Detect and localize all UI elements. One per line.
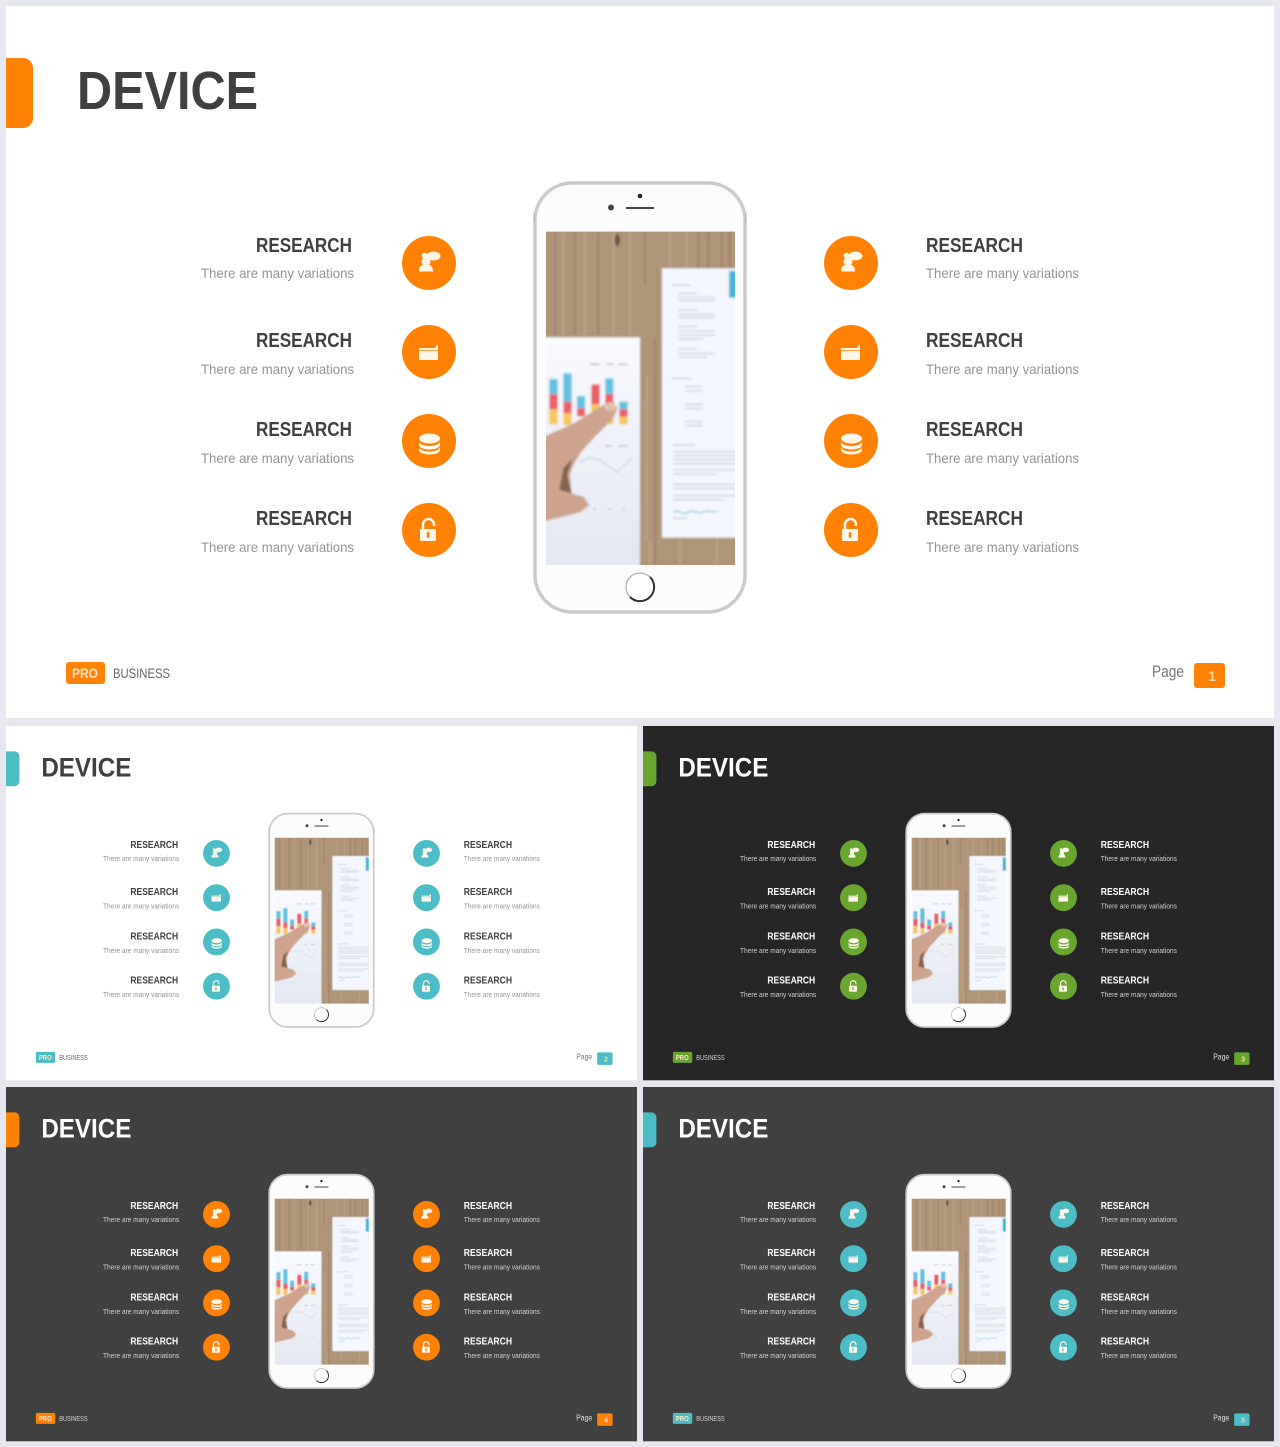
icon: database left	[203, 929, 230, 955]
footer brand: PRO	[39, 1416, 52, 1423]
left row 3: There are many variations	[103, 1309, 180, 1316]
left row 2: RESEARCH	[767, 887, 815, 898]
left row 1: There are many variations	[740, 856, 817, 863]
icon: folder left	[203, 1245, 230, 1272]
icon: folder right	[1050, 884, 1077, 911]
left row 4: There are many variations	[103, 992, 180, 999]
right row 3: There are many variations	[926, 450, 1079, 466]
left row 1: There are many variations	[103, 1217, 180, 1224]
left row 1: RESEARCH	[767, 1201, 815, 1212]
right row 2	[464, 887, 540, 911]
icon: folder left	[840, 1245, 867, 1272]
icon: open lock right	[1050, 1334, 1077, 1361]
footer brand: BUSINESS	[113, 665, 170, 681]
icon: open lock left	[203, 1334, 230, 1361]
icon: person chat right	[413, 1201, 440, 1228]
right row 4: RESEARCH	[464, 1337, 512, 1348]
footer brand	[66, 662, 170, 684]
right row 2: RESEARCH	[1101, 887, 1149, 898]
right row 1	[1101, 840, 1177, 863]
right row 2: There are many variations	[926, 361, 1079, 377]
left row 2	[201, 330, 354, 377]
panel: slide 4 grey orange	[6, 1087, 637, 1441]
icon: database right	[1050, 929, 1077, 955]
accent tab	[643, 1112, 656, 1147]
left row 1	[201, 235, 354, 281]
right row 2: RESEARCH	[464, 1248, 512, 1259]
icon: person chat left	[203, 1201, 230, 1228]
right row 3	[1101, 931, 1177, 955]
footer brand	[36, 1413, 88, 1424]
left row 3: There are many variations	[103, 948, 180, 955]
right row 2	[1101, 1248, 1177, 1272]
right row 2: There are many variations	[464, 1265, 540, 1272]
left row 4	[103, 1337, 180, 1360]
icon: folder right	[413, 884, 440, 911]
title: DEVICE	[678, 1114, 768, 1144]
accent tab	[6, 1112, 19, 1147]
left row 2: There are many variations	[740, 904, 817, 911]
left row 4: RESEARCH	[130, 976, 178, 987]
phone with photo	[534, 183, 746, 612]
page number: Page	[1213, 1412, 1229, 1422]
left row 4: RESEARCH	[767, 976, 815, 987]
right row 1	[464, 1201, 540, 1224]
page number: Page	[1213, 1051, 1229, 1061]
icon: folder left	[203, 884, 230, 911]
left row 4	[740, 976, 817, 999]
right row 3	[926, 419, 1079, 466]
right row 3	[464, 1292, 540, 1316]
left row 1: There are many variations	[740, 1217, 817, 1224]
right row 1: RESEARCH	[464, 1201, 512, 1212]
page number: 4	[604, 1417, 608, 1424]
left row 3: RESEARCH	[256, 419, 352, 441]
icon: database left	[840, 929, 867, 955]
right row 4: There are many variations	[1101, 1353, 1177, 1360]
right row 3: There are many variations	[464, 1309, 540, 1316]
right row 4: There are many variations	[926, 539, 1079, 555]
right row 4	[926, 508, 1079, 555]
page number	[1213, 1412, 1250, 1426]
left row 2: There are many variations	[201, 361, 354, 377]
left row 4	[201, 508, 354, 555]
left row 2	[740, 887, 817, 911]
left row 3: There are many variations	[740, 1309, 817, 1316]
icon: person chat right	[1050, 1201, 1077, 1228]
accent tab	[6, 751, 19, 786]
right row 2: There are many variations	[464, 904, 540, 911]
left row 4	[740, 1337, 817, 1360]
left row 1: RESEARCH	[130, 840, 178, 851]
left row 3: There are many variations	[201, 450, 354, 466]
footer brand: BUSINESS	[696, 1055, 725, 1062]
title: DEVICE	[41, 753, 131, 783]
left row 4: There are many variations	[201, 539, 354, 555]
footer brand	[36, 1052, 88, 1063]
left row 1	[740, 840, 817, 863]
left row 3: RESEARCH	[130, 1292, 178, 1303]
title: DEVICE	[77, 61, 258, 121]
icon: person chat right	[824, 236, 878, 290]
right row 4: RESEARCH	[1101, 1337, 1149, 1348]
right row 1: RESEARCH	[464, 840, 512, 851]
page number: Page	[1152, 662, 1184, 681]
icon: database left	[402, 414, 456, 468]
left row 1: RESEARCH	[767, 840, 815, 851]
icon: person chat right	[1050, 840, 1077, 867]
right row 3: There are many variations	[1101, 948, 1177, 955]
left row 4: RESEARCH	[767, 1337, 815, 1348]
right row 1: There are many variations	[926, 265, 1079, 281]
footer brand: PRO	[676, 1055, 689, 1062]
left row 1	[740, 1201, 817, 1224]
right row 2	[1101, 887, 1177, 911]
icon: database left	[840, 1290, 867, 1316]
left row 1: RESEARCH	[256, 235, 352, 257]
icon: open lock right	[1050, 973, 1077, 1000]
left row 1: There are many variations	[201, 265, 354, 281]
right row 4: There are many variations	[464, 1353, 540, 1360]
panel: slide 3 black green	[643, 726, 1274, 1080]
left row 2	[740, 1248, 817, 1272]
phone with photo	[905, 814, 1011, 1027]
left row 2: RESEARCH	[767, 1248, 815, 1259]
right row 2	[464, 1248, 540, 1272]
left row 3	[103, 1292, 180, 1316]
right row 1	[1101, 1201, 1177, 1224]
page number	[576, 1051, 613, 1065]
right row 3: There are many variations	[464, 948, 540, 955]
panel: slide 5 grey teal	[643, 1087, 1274, 1441]
icon: open lock left	[203, 973, 230, 1000]
right row 2	[926, 330, 1079, 377]
page number	[576, 1412, 613, 1426]
icon: person chat left	[840, 840, 867, 867]
left row 4: There are many variations	[103, 1353, 180, 1360]
icon: open lock right	[824, 503, 878, 557]
title: DEVICE	[678, 753, 768, 783]
icon: folder right	[824, 325, 878, 379]
right row 1	[464, 840, 540, 863]
panel: slide 2 white teal	[6, 726, 637, 1080]
left row 1: RESEARCH	[130, 1201, 178, 1212]
left row 2: There are many variations	[103, 904, 180, 911]
icon: person chat left	[203, 840, 230, 867]
page number: Page	[576, 1412, 592, 1422]
left row 1	[103, 1201, 180, 1224]
right row 3: RESEARCH	[464, 931, 512, 942]
right row 1	[926, 235, 1079, 281]
left row 3: There are many variations	[740, 948, 817, 955]
page number: 5	[1241, 1417, 1245, 1424]
icon: open lock left	[840, 1334, 867, 1361]
phone with photo	[268, 814, 374, 1027]
right row 1: There are many variations	[464, 1217, 540, 1224]
right row 2: RESEARCH	[1101, 1248, 1149, 1259]
right row 3	[1101, 1292, 1177, 1316]
right row 3: RESEARCH	[464, 1292, 512, 1303]
icon: folder left	[840, 884, 867, 911]
left row 2: There are many variations	[103, 1265, 180, 1272]
footer brand: PRO	[39, 1055, 52, 1062]
footer brand: PRO	[676, 1416, 689, 1423]
right row 3: RESEARCH	[1101, 931, 1149, 942]
footer brand: BUSINESS	[59, 1416, 88, 1423]
panel: slide 1 large white orange	[6, 6, 1274, 718]
right row 1: RESEARCH	[1101, 840, 1149, 851]
left row 2: There are many variations	[740, 1265, 817, 1272]
left row 1	[103, 840, 180, 863]
right row 1: There are many variations	[464, 856, 540, 863]
accent tab	[643, 751, 656, 786]
left row 2: RESEARCH	[130, 887, 178, 898]
icon: open lock left	[840, 973, 867, 1000]
icon: database right	[824, 414, 878, 468]
right row 4: RESEARCH	[1101, 976, 1149, 987]
right row 3: RESEARCH	[1101, 1292, 1149, 1303]
left row 3: RESEARCH	[767, 1292, 815, 1303]
left row 3: RESEARCH	[767, 931, 815, 942]
left row 2	[103, 1248, 180, 1272]
page number: Page	[576, 1051, 592, 1061]
accent tab	[6, 58, 33, 128]
footer brand: BUSINESS	[696, 1416, 725, 1423]
icon: database right	[413, 929, 440, 955]
right row 3: There are many variations	[1101, 1309, 1177, 1316]
icon: person chat left	[402, 236, 456, 290]
icon: database right	[413, 1290, 440, 1316]
icon: folder right	[1050, 1245, 1077, 1272]
right row 4: RESEARCH	[464, 976, 512, 987]
left row 4: RESEARCH	[130, 1337, 178, 1348]
page number	[1213, 1051, 1250, 1065]
left row 4: RESEARCH	[256, 508, 352, 530]
page number	[1152, 662, 1225, 688]
icon: open lock left	[402, 503, 456, 557]
left row 2: RESEARCH	[130, 1248, 178, 1259]
right row 3: RESEARCH	[926, 419, 1023, 441]
right row 4	[464, 976, 540, 999]
left row 3	[740, 931, 817, 955]
right row 4	[1101, 1337, 1177, 1360]
right row 1: There are many variations	[1101, 1217, 1177, 1224]
icon: person chat left	[840, 1201, 867, 1228]
right row 4: RESEARCH	[926, 508, 1023, 530]
icon: open lock right	[413, 1334, 440, 1361]
right row 3	[464, 931, 540, 955]
right row 1: RESEARCH	[926, 235, 1023, 257]
icon: database right	[1050, 1290, 1077, 1316]
right row 2: There are many variations	[1101, 1265, 1177, 1272]
title: DEVICE	[41, 1114, 131, 1144]
icon: person chat right	[413, 840, 440, 867]
right row 4: There are many variations	[1101, 992, 1177, 999]
left row 3	[201, 419, 354, 466]
left row 3	[740, 1292, 817, 1316]
right row 1: There are many variations	[1101, 856, 1177, 863]
right row 2: RESEARCH	[464, 887, 512, 898]
left row 2	[103, 887, 180, 911]
left row 1: There are many variations	[103, 856, 180, 863]
phone with photo	[268, 1175, 374, 1388]
icon: open lock right	[413, 973, 440, 1000]
right row 2: RESEARCH	[926, 330, 1023, 352]
right row 4: There are many variations	[464, 992, 540, 999]
left row 4	[103, 976, 180, 999]
left row 3	[103, 931, 180, 955]
left row 4: There are many variations	[740, 1353, 817, 1360]
page number: 3	[1241, 1056, 1245, 1063]
footer brand	[673, 1413, 725, 1424]
right row 2: There are many variations	[1101, 904, 1177, 911]
phone with photo	[905, 1175, 1011, 1388]
right row 4	[464, 1337, 540, 1360]
icon: database left	[203, 1290, 230, 1316]
icon: folder right	[413, 1245, 440, 1272]
footer brand	[673, 1052, 725, 1063]
left row 2: RESEARCH	[256, 330, 352, 352]
right row 4	[1101, 976, 1177, 999]
footer brand: BUSINESS	[59, 1055, 88, 1062]
page number: 2	[604, 1056, 608, 1063]
left row 4: There are many variations	[740, 992, 817, 999]
footer brand: PRO	[72, 665, 98, 681]
right row 1: RESEARCH	[1101, 1201, 1149, 1212]
page number: 1	[1208, 668, 1216, 684]
icon: folder left	[402, 325, 456, 379]
left row 3: RESEARCH	[130, 931, 178, 942]
